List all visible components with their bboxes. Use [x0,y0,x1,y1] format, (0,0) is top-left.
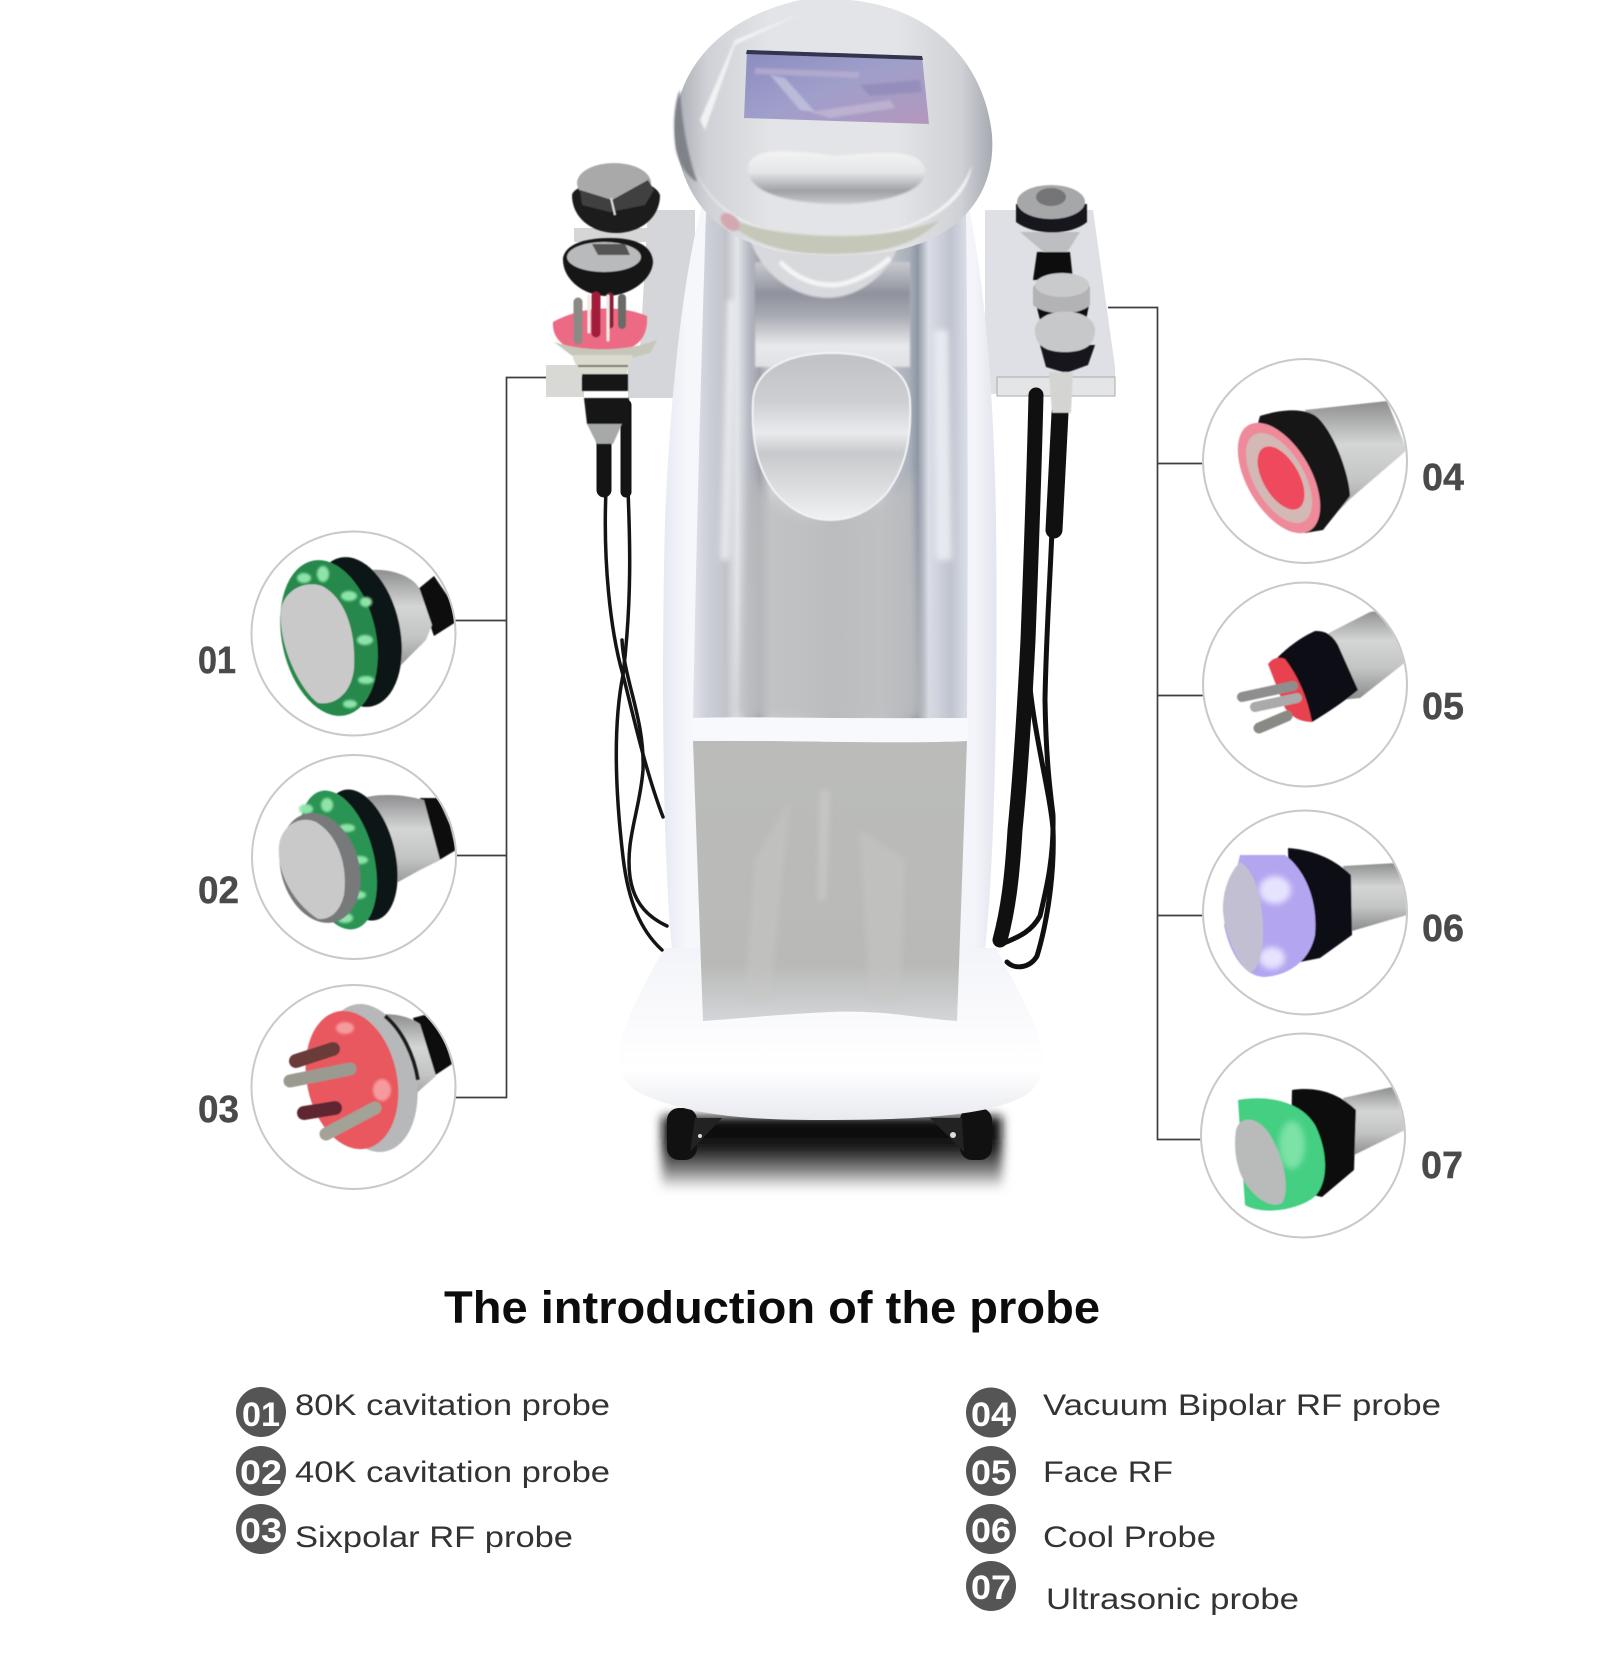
probe artwork [1237,400,1406,534]
white divider bar [692,717,968,742]
title: The introduction of the probe [444,1282,1100,1333]
circle outline [1203,810,1407,1014]
handpiece: ultrasonic [1016,185,1087,280]
handpiece: round silver 2 [1035,312,1095,413]
left handpieces on shelf [553,163,660,444]
handpiece: red sixpolar face [553,308,647,350]
body frame [663,205,997,950]
left acrylic shelf backing [628,210,695,398]
screen mottling [755,68,922,118]
probe circle 05 [1203,582,1407,786]
handpiece: black neck [582,374,628,391]
probe artwork [290,995,452,1161]
right handpieces on shelf [1016,185,1095,413]
base [619,948,1043,1120]
handpiece: silver tail [587,424,622,444]
probe circle 07 [1201,1034,1405,1238]
inner panel top glare [755,262,910,367]
neck glints [780,258,890,285]
number 07: 07 [1421,1145,1463,1187]
label 03: Sixpolar RF probe [295,1521,573,1554]
label 05: Face RF [1043,1456,1173,1489]
right acrylic shelf [997,377,1115,396]
head lower rim [722,215,940,254]
label 07: Ultrasonic probe [1046,1583,1299,1616]
circle outline [1203,582,1407,786]
badge 03: 03 [240,1512,282,1550]
handpiece: 40K head [563,238,653,296]
handpiece: silver rim [554,340,657,358]
badge 05: 05 [971,1454,1011,1492]
circle outline [1203,359,1407,563]
recessed oval bowl [753,353,910,520]
wheels [667,1108,992,1160]
circle outline [252,985,456,1189]
head white lower band [695,165,972,240]
circle outline [252,532,456,736]
handpiece: black sleeve [584,398,629,424]
floor shadow [662,1116,1002,1190]
badge 02 [236,1446,286,1496]
badge 05 [966,1446,1016,1496]
upper silver panel [693,212,968,718]
probe artwork [1223,848,1407,977]
number 02: 02 [198,870,239,912]
head shell [675,0,992,256]
badge 07: 07 [971,1569,1011,1607]
probe circle 03 [252,985,456,1189]
left cables [604,405,667,950]
badge 04 [966,1388,1016,1438]
neck [750,240,900,298]
badge 01 [236,1387,286,1437]
badge 07 [966,1561,1016,1611]
screen bezel edge [746,50,923,60]
handpiece: 80K head [572,163,660,233]
number 04: 04 [1422,457,1464,499]
probe artwork [278,788,455,930]
probe artwork [1235,1087,1405,1211]
connector lines: right group [1108,308,1203,1140]
probe artwork [1242,609,1407,728]
handpiece: round silver 1 [1033,273,1090,320]
badge 04: 04 [971,1396,1011,1434]
number 05: 05 [1422,686,1464,728]
pink reflection [717,210,743,234]
probe circle 01 [252,532,456,736]
probe artwork [279,556,454,717]
left acrylic shelf [546,365,584,397]
probe number labels [198,457,1464,1187]
probe circle 06 [1203,810,1407,1014]
probe circle 04 [1203,359,1407,563]
circle outline [1201,1034,1405,1238]
label 06: Cool Probe [1043,1521,1216,1554]
label 01: 80K cavitation probe [295,1389,610,1422]
badge 02: 02 [240,1454,282,1492]
handle recess [748,151,925,204]
number 06: 06 [1422,908,1464,950]
legend: left column [236,1387,610,1554]
below-bowl silver sheen [735,470,925,717]
number 01: 01 [198,640,236,682]
head upper bevel [700,14,800,130]
head dark left edge [674,90,697,182]
screen [744,50,929,124]
label 02: 40K cavitation probe [295,1456,610,1489]
lower panel reflections [745,790,905,1000]
right acrylic shelf backing [985,210,1115,394]
right cables [1000,395,1060,967]
connector lines: left group [455,378,546,1098]
circle outline [252,755,456,959]
label 04: Vacuum Bipolar RF probe [1043,1389,1441,1422]
probe circle 02 [252,755,456,959]
left shelf strip between probes [574,228,650,242]
number 03: 03 [198,1089,239,1131]
machine illustration [546,0,1115,1190]
badge 03 [236,1504,286,1554]
head unit [674,0,992,256]
handpiece: collar line [578,365,628,367]
badge 01: 01 [242,1396,280,1434]
handpiece: silver collar tiers [572,355,633,376]
silver band streaks [720,300,952,560]
lower silver panel [693,741,967,1021]
legend: right column [966,1388,1441,1616]
badge 06: 06 [971,1512,1011,1550]
badge 06 [966,1504,1016,1554]
handpiece: sixpolar pins [578,296,622,340]
infographic canvas [199,0,1464,1615]
